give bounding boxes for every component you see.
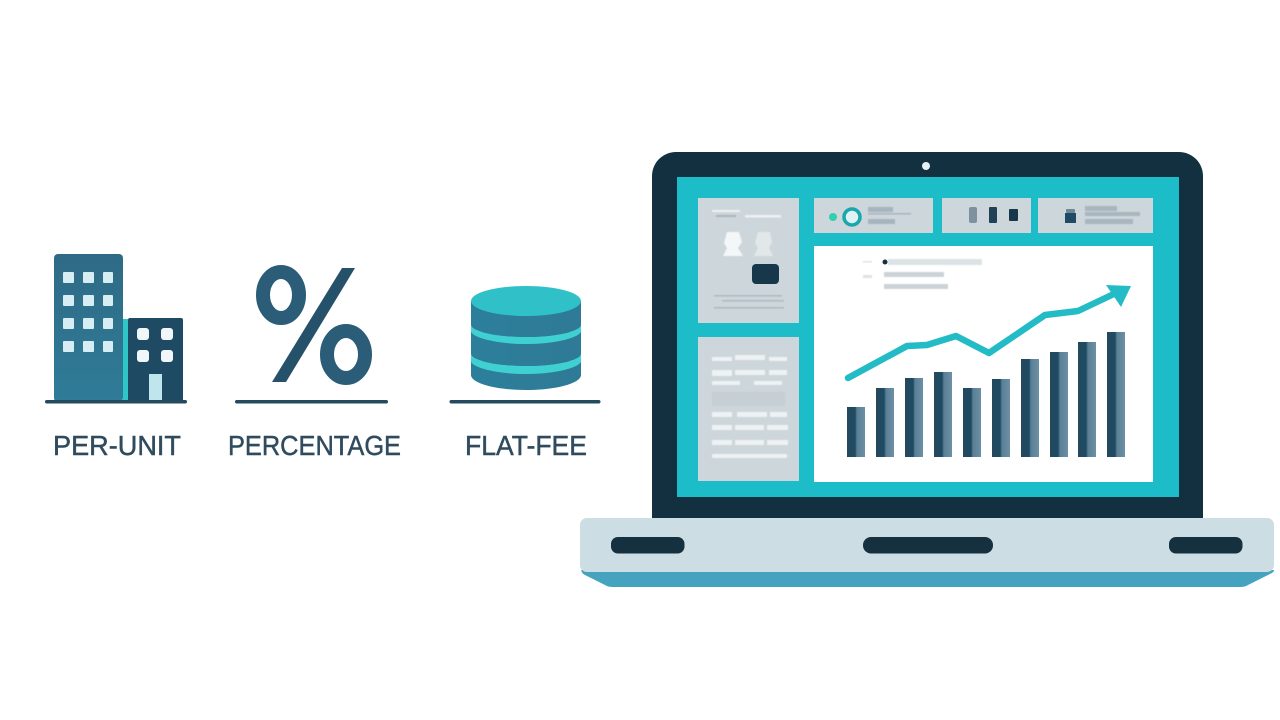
trend arrow <box>848 285 1131 378</box>
dark button <box>752 264 779 284</box>
screen <box>677 177 1179 497</box>
keyboard slot left <box>611 537 684 554</box>
label: per-unit: PER-UNIT <box>53 430 181 461</box>
icon: percent sign <box>263 268 365 382</box>
baseline: per-unit <box>45 400 187 404</box>
panel: stat card one <box>814 198 933 233</box>
panel: stat card three <box>1038 198 1153 233</box>
baseline: flat-fee <box>450 400 600 404</box>
laptop <box>580 152 1274 587</box>
laptop base <box>580 518 1274 587</box>
bar chart <box>847 332 1125 457</box>
icon: database cylinder (flat-fee) <box>471 286 581 390</box>
webcam <box>922 162 930 170</box>
label: flat-fee: FLAT-FEE <box>465 430 587 461</box>
icon: buildings (per-unit) <box>54 254 183 402</box>
keyboard slot right <box>1169 537 1242 554</box>
panel: main chart <box>814 246 1153 482</box>
label: percentage: PERCENTAGE <box>228 430 401 461</box>
panel: data table card <box>698 337 799 481</box>
baseline: percentage <box>235 400 388 404</box>
laptop lid <box>652 152 1203 518</box>
legend list <box>863 259 982 289</box>
panel: profile card <box>698 198 799 323</box>
panel: stat card two <box>942 198 1031 233</box>
keyboard slot center <box>863 537 993 554</box>
